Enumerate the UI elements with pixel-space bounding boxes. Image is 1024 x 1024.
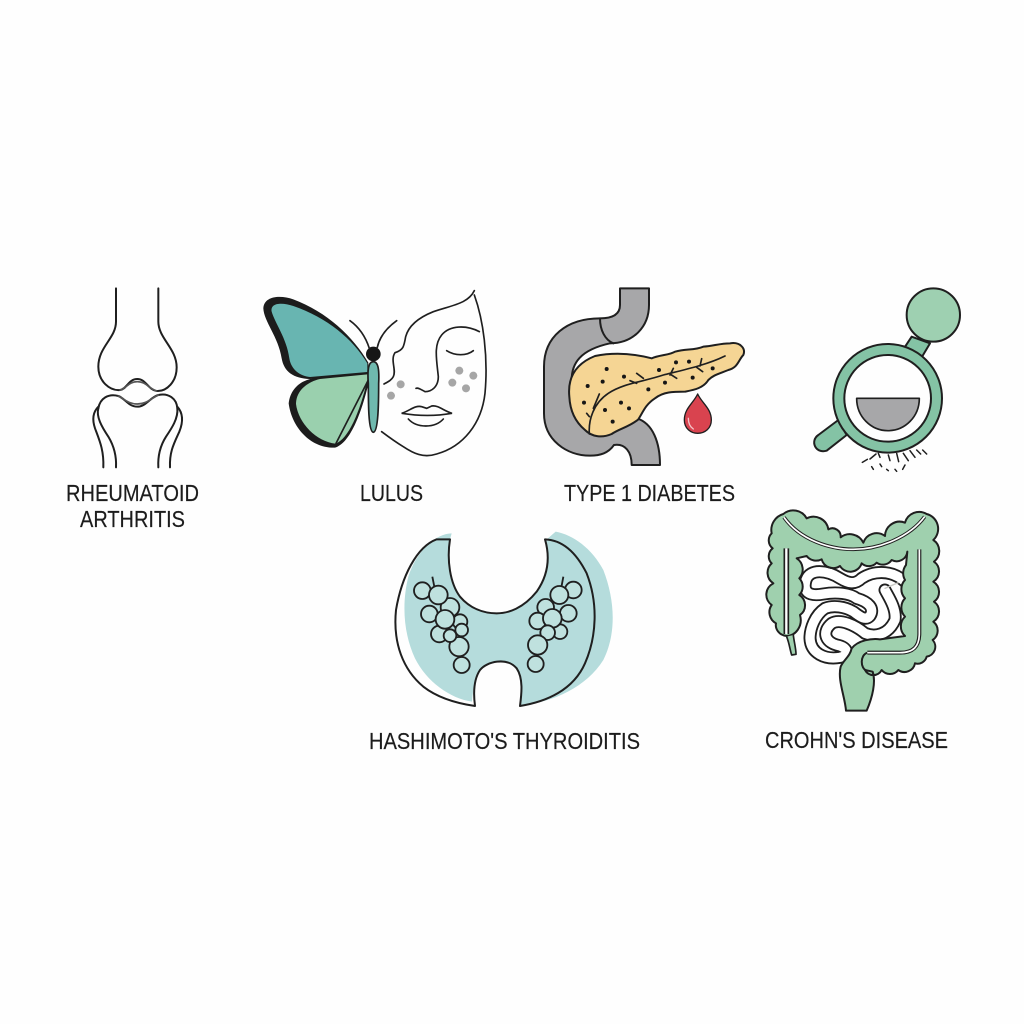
label: Rheumatoid Arthritis: RHEUMATOID bbox=[66, 480, 199, 506]
duodenum bbox=[544, 288, 660, 465]
ball bbox=[907, 288, 960, 342]
icon: intestines bbox=[766, 510, 939, 711]
upper wing bbox=[263, 297, 368, 379]
label: Rheumatoid Arthritis: ARTHRITIS bbox=[80, 506, 185, 532]
icon: face with rash bbox=[382, 291, 486, 456]
label: Type 1 Diabetes: TYPE 1 DIABETES bbox=[564, 480, 735, 506]
lower handle bbox=[814, 420, 847, 451]
icon: thyroid gland bbox=[395, 532, 613, 706]
icon: butterfly bbox=[263, 297, 397, 448]
bottom loop end bbox=[862, 653, 867, 671]
icon: magnifier with bowl bbox=[814, 288, 960, 471]
left bone lines bbox=[93, 407, 103, 467]
label: Crohn's Disease: CROHN'S DISEASE bbox=[765, 727, 948, 753]
right nodules bbox=[528, 577, 582, 672]
upper handle bbox=[904, 337, 930, 357]
label: Rheumatoid Arthritis bbox=[66, 480, 199, 532]
blood drop bbox=[684, 394, 711, 433]
appendix bbox=[787, 635, 796, 655]
teal fill bbox=[404, 532, 613, 705]
icon: knee joint bbox=[93, 288, 182, 467]
head bbox=[366, 347, 381, 361]
half bowl bbox=[857, 398, 919, 431]
lower wing bbox=[289, 373, 369, 448]
body bbox=[368, 362, 379, 432]
ring bbox=[833, 344, 942, 453]
small intestine bbox=[805, 572, 905, 658]
label: Lulus: LULUS bbox=[360, 480, 423, 506]
left nodules bbox=[414, 577, 470, 673]
right bone lines bbox=[170, 407, 182, 467]
outline bbox=[395, 539, 595, 706]
pancreas bbox=[569, 343, 744, 436]
icon: pancreas with duodenum bbox=[544, 288, 744, 465]
fuzz bbox=[862, 450, 927, 471]
inner tube lines bbox=[784, 517, 925, 549]
large intestine bbox=[766, 510, 939, 711]
label: Hashimoto's Thyroiditis: HASHIMOTO'S THYROIDITIS bbox=[369, 728, 640, 754]
rash dots bbox=[387, 367, 477, 400]
